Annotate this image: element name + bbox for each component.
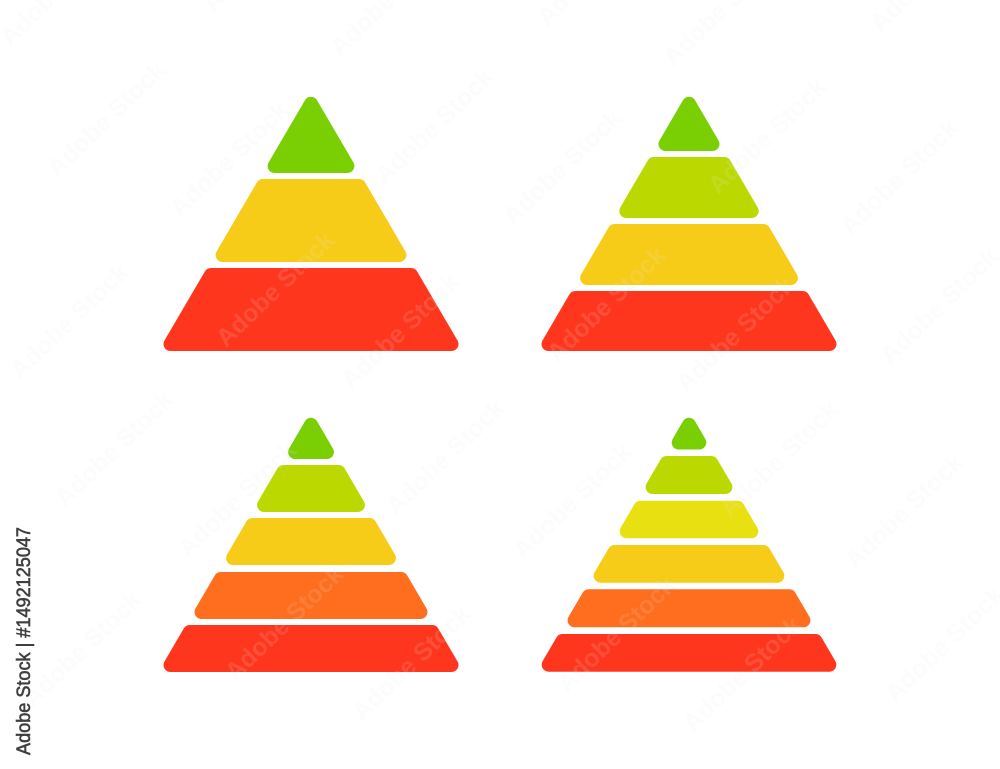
watermark pattern: Adobe Stock: [542, 241, 671, 367]
watermark pattern: Adobe Stock: [347, 600, 476, 726]
watermark pattern: Adobe Stock: [678, 611, 807, 737]
watermark pattern: Adobe Stock: [336, 268, 465, 394]
tier: orange: [202, 579, 420, 612]
tier: green top: [666, 104, 712, 144]
watermark pattern: Adobe Stock: [50, 386, 179, 512]
watermark pattern: Adobe Stock: [370, 63, 499, 189]
watermark pattern: Adobe Stock: [703, 73, 832, 199]
watermark pattern: Adobe Stock: [18, 586, 147, 712]
watermark pattern: Adobe Stock: [381, 394, 510, 520]
tier: yellow: [627, 508, 751, 531]
tier: amber middle: [223, 186, 399, 255]
vertical stock id caption: Adobe Stock | #1492125047: [14, 527, 35, 755]
watermark pattern: Adobe Stock: [211, 226, 340, 352]
tier: green top: [679, 425, 699, 442]
pyramid: four tiers: [548, 104, 830, 344]
watermark pattern: Adobe Stock: [173, 436, 302, 562]
pyramid: three tiers: [170, 104, 452, 344]
watermark pattern: Adobe Stock: [508, 438, 637, 564]
tier: green top: [295, 425, 327, 452]
tier: red base: [549, 641, 829, 665]
tier: green top: [275, 104, 347, 166]
watermark pattern: Adobe Stock: [715, 396, 844, 522]
tier: lime: [653, 463, 725, 487]
tier: orange: [575, 596, 803, 620]
tier: lime: [264, 472, 358, 505]
watermark pattern: Adobe Stock: [42, 56, 171, 182]
watermark pattern: Adobe Stock: [552, 571, 681, 697]
tier: red base: [170, 275, 452, 344]
tier: red base: [170, 632, 452, 665]
watermark pattern: Adobe Stock: [498, 104, 627, 230]
tier: lime: [626, 164, 752, 211]
watermark pattern: Adobe Stock: [840, 448, 969, 574]
tier: amber: [601, 552, 777, 576]
watermark pattern: Adobe Stock: [220, 560, 349, 686]
watermark pattern: Adobe Stock: [5, 258, 134, 384]
pyramid: five tiers: [170, 425, 452, 665]
tier: amber: [233, 525, 389, 558]
watermark pattern: Adobe Stock: [835, 114, 964, 240]
watermark pattern: Adobe Stock: [165, 96, 294, 222]
tier: amber: [587, 231, 791, 278]
tier: red base: [548, 298, 830, 344]
watermark pattern: Adobe Stock: [671, 271, 800, 397]
pyramid: six tiers: [549, 425, 829, 665]
